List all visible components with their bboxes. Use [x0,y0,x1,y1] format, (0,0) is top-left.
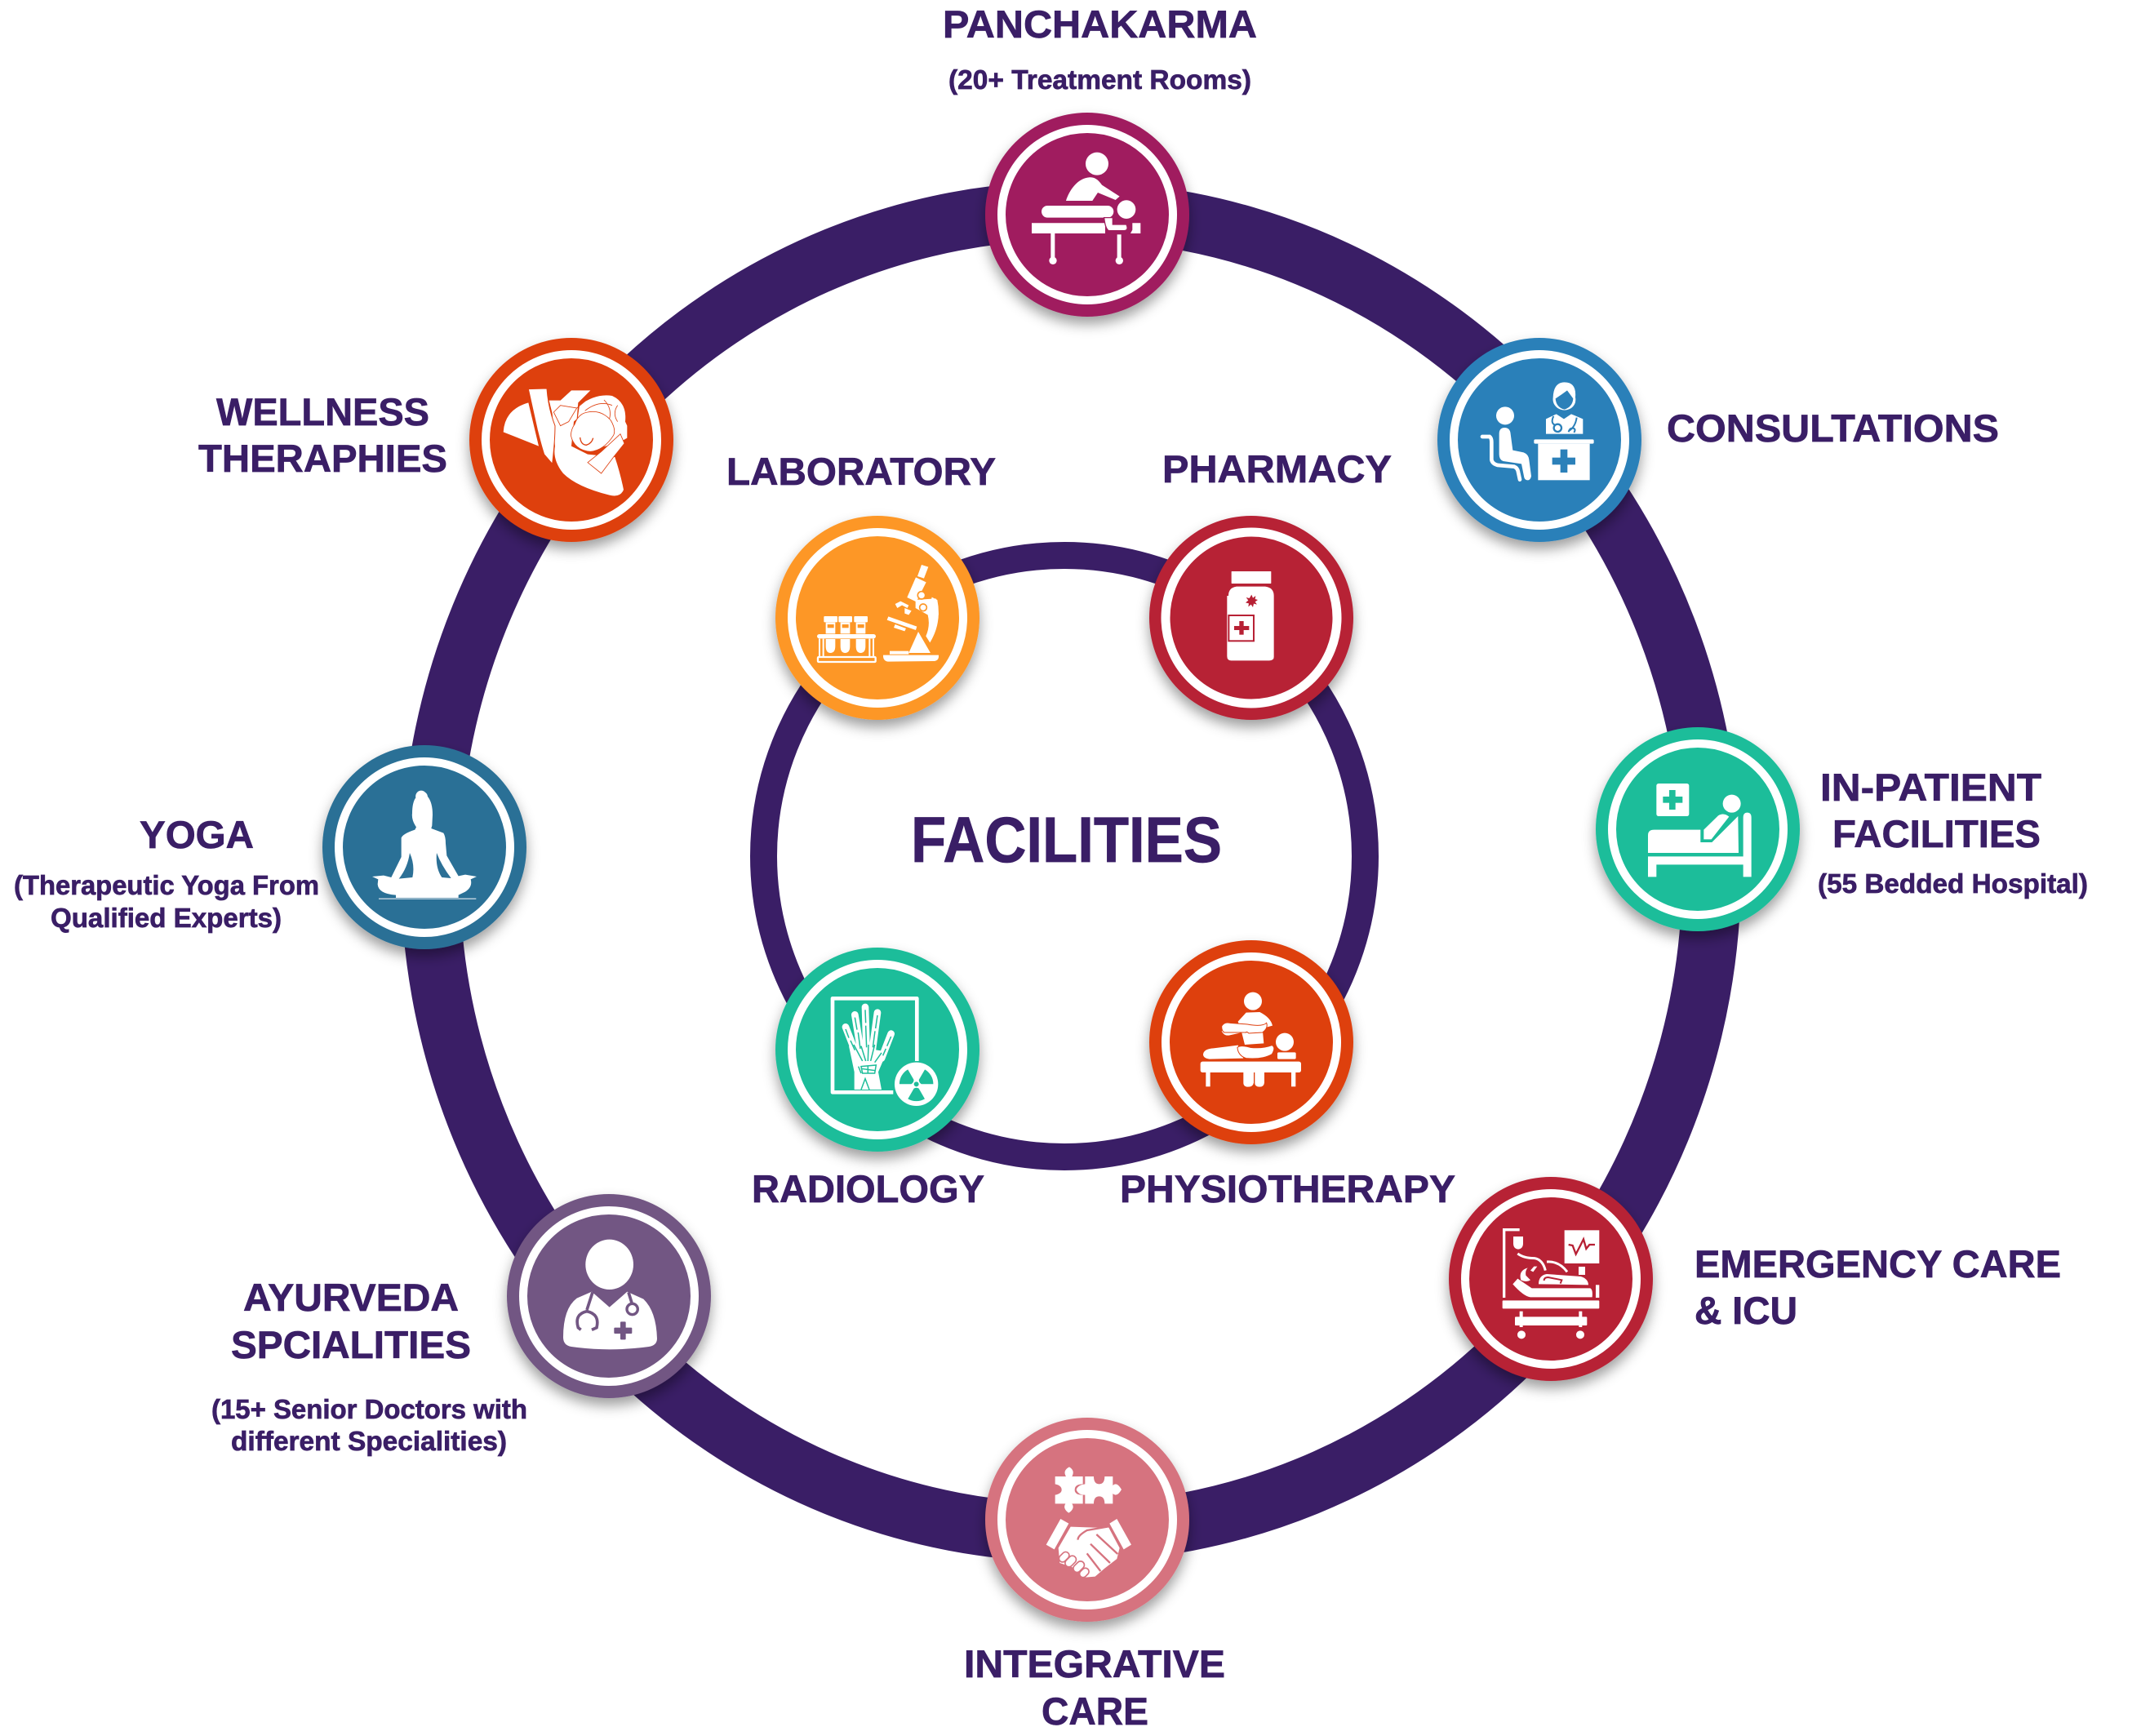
node: Pharmacy [1149,516,1353,720]
title: FACILITIES [911,803,1222,876]
node: Laboratory [775,516,979,720]
label: Yoga: YOGA [140,813,254,856]
label: Emergency Care and ICU: EMERGENCY CARE [1695,1242,2061,1285]
label: Wellness Theraphies: WELLNESS [216,390,429,433]
label: Ayurveda Specialities: (15+ Senior Doctors with [211,1394,527,1424]
label: In-Patient Facilities: (55 Bedded Hospital) [1818,868,2088,899]
node: Yoga [322,745,526,949]
icon: hand x-ray with radiation symbol [833,998,938,1106]
label: Ayurveda Specialities: different Specialities) [231,1426,507,1456]
node: Physiotherapy [1149,940,1353,1144]
node: Ayurveda Specialities [507,1194,711,1398]
icon: shoulder massage [504,388,627,495]
label: Integrative Care: INTEGRATIVE [964,1642,1225,1685]
label: In-Patient Facilities: FACILITIES [1832,812,2041,855]
label: Pharmacy: PHARMACY [1162,447,1392,491]
label: Emergency Care and ICU: & ICU [1695,1289,1797,1332]
label: Consultations: CONSULTATIONS [1667,406,1999,450]
outer ring [430,211,1712,1533]
icon: doctor consultation [1482,382,1594,480]
node: Integrative Care [985,1418,1189,1622]
node: Radiology [775,948,979,1152]
icon: massage table [1032,153,1140,264]
label: Wellness Theraphies [198,390,447,480]
icon: ICU bed and monitor [1503,1230,1599,1339]
label: Wellness Theraphies: THERAPHIES [198,437,447,480]
label: Yoga: Qualified Experts) [51,903,282,933]
label: In-Patient Facilities [1818,766,2088,899]
label: Integrative Care: CARE [1042,1689,1148,1733]
icon: test tubes and microscope [817,565,939,662]
icon: hospital bed [1648,784,1752,877]
label: Physiotherapy: PHYSIOTHERAPY [1120,1167,1455,1210]
label: Panchakarma: (20+ Treatment Rooms) [948,64,1251,95]
label: Ayurveda Specialities: AYURVEDA [243,1276,459,1319]
label: Panchakarma [943,2,1257,95]
icon: doctor [563,1240,657,1349]
label: Laboratory: LABORATORY [726,450,996,493]
label: Emergency Care and ICU [1695,1242,2061,1332]
label: Yoga [14,813,319,933]
icon: meditating figure [372,791,477,899]
icon: physiotherapist and patient [1201,992,1301,1087]
node: Consultations [1437,338,1641,542]
icon: medicine bottle [1227,571,1274,660]
label: Ayurveda Specialities [211,1276,527,1456]
inner ring [764,555,1365,1157]
label: In-Patient Facilities: IN-PATIENT [1820,766,2041,809]
node: Emergency Care and ICU [1449,1177,1653,1381]
label: Ayurveda Specialities: SPCIALITIES [231,1323,471,1366]
label: Integrative Care [964,1642,1225,1733]
label: Panchakarma: PANCHAKARMA [943,2,1257,46]
node: Wellness Theraphies [469,338,673,542]
label: Radiology: RADIOLOGY [752,1167,984,1210]
node: In-Patient Facilities [1596,727,1800,931]
label: Yoga: (Therapeutic Yoga From [14,870,319,900]
icon: puzzle and handshake [1046,1467,1131,1579]
node: Panchakarma [985,113,1189,317]
